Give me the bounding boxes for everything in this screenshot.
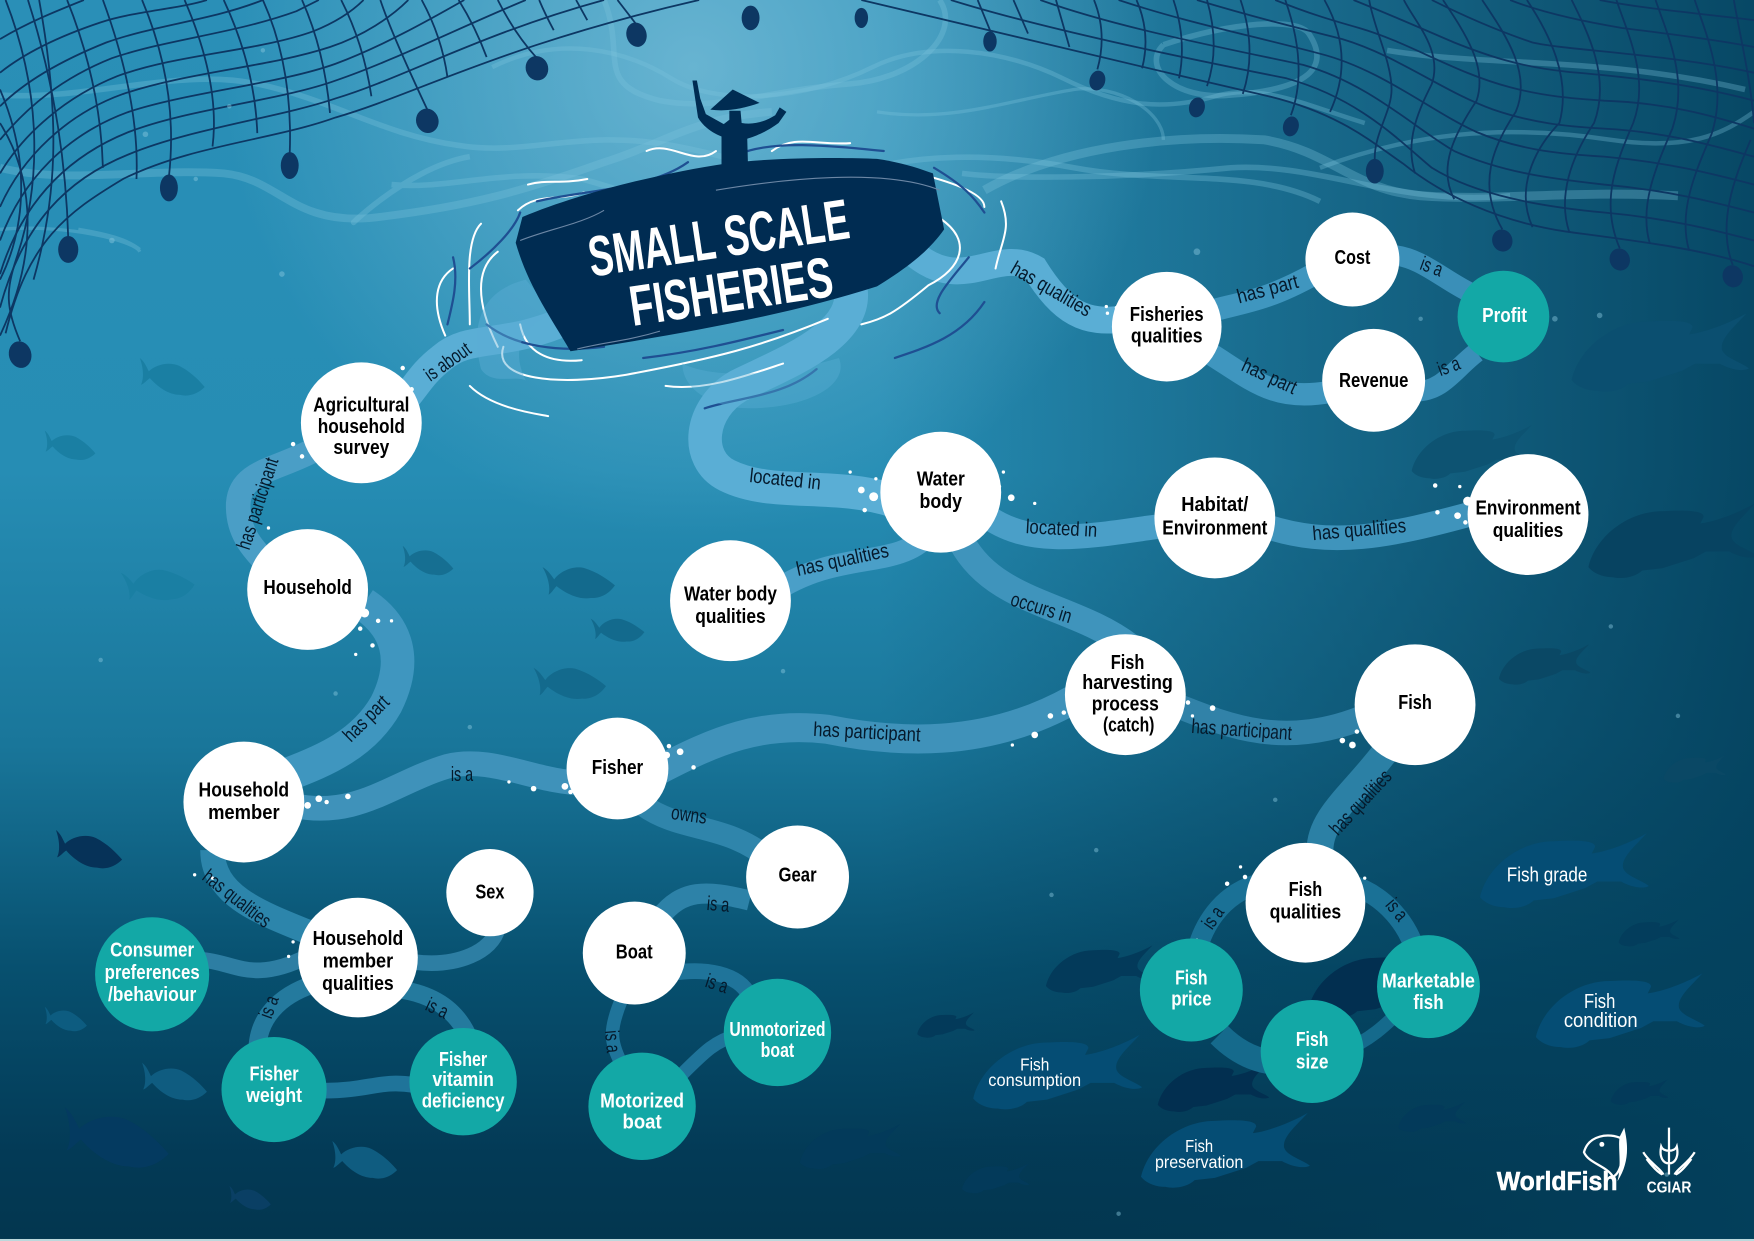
connector labels: is a	[1381, 894, 1412, 926]
boat hull	[516, 158, 944, 351]
node: Fisher vitamin deficiency: deficiency	[422, 1089, 505, 1112]
node: Fish qualities	[1246, 843, 1365, 963]
connector labels	[198, 253, 1464, 1054]
node: Fish size	[1261, 1000, 1364, 1103]
node: Fish size: Fish	[1296, 1028, 1328, 1051]
logo: CGIAR: CGIAR	[1647, 1179, 1691, 1196]
node: Fish harvesting process (catch): Fish	[1111, 651, 1144, 674]
node: Unmotorized boat: Unmotorized	[729, 1018, 826, 1041]
node: Habitat/Environment: Habitat/	[1181, 493, 1249, 516]
node: Boat	[583, 902, 686, 1005]
labelled fish: Fish condition: condition	[1564, 1010, 1638, 1032]
node: Boat: Boat	[616, 941, 653, 964]
node: Profit	[1458, 271, 1549, 362]
node: Consumer preferences/behaviour: Consumer	[110, 938, 194, 961]
node: Fish harvesting process (catch): (catch)	[1103, 714, 1154, 737]
node: Water body	[880, 432, 1001, 553]
labelled fish: Fish consumption: Fish	[1020, 1055, 1049, 1075]
node: Unmotorized boat	[724, 979, 831, 1086]
node: Fisher weight: weight	[245, 1084, 302, 1107]
connector labels: is a	[255, 992, 284, 1021]
connector labels: is a	[451, 764, 474, 786]
node: Fish price: Fish	[1175, 966, 1208, 989]
water surface light caustics	[0, 0, 1754, 252]
node: Fish qualities: Fish	[1289, 878, 1322, 901]
connector labels: is a	[1435, 352, 1464, 381]
node: Fisher vitamin deficiency	[409, 1028, 517, 1135]
node: Household member qualities: Household	[313, 927, 403, 950]
node: Agricultural household survey	[301, 362, 422, 483]
node: Revenue	[1322, 329, 1425, 432]
node: Motorized boat: boat	[623, 1111, 662, 1134]
node: Water body qualities	[670, 540, 791, 661]
node: Fish size: size	[1296, 1050, 1328, 1073]
node: Fish: Fish	[1398, 691, 1432, 714]
node: Fisher weight	[221, 1037, 327, 1142]
connector labels: has part	[339, 691, 394, 746]
net floats	[6, 6, 1746, 370]
node: Motorized boat: Motorized	[600, 1089, 684, 1112]
labelled fish: Fish preservation: preservation	[1155, 1152, 1243, 1172]
connector labels: located in	[748, 465, 822, 494]
labelled fish: Fish grade: Fish grade	[1507, 864, 1587, 886]
connector labels: is a	[422, 994, 452, 1024]
connector labels: is a	[1417, 253, 1446, 282]
connector labels: has part	[1238, 355, 1300, 399]
connector labels: owns	[670, 802, 708, 829]
node: Consumer preferences/behaviour	[95, 917, 209, 1031]
node: Fisher vitamin deficiency: vitamin	[432, 1068, 494, 1091]
node: Marketable fish: Marketable	[1382, 970, 1475, 993]
connector labels: has participant	[813, 719, 921, 746]
labelled fish: Fish condition	[1536, 973, 1705, 1048]
node: Water body qualities: Water body	[684, 583, 777, 606]
logo: CGIAR	[1643, 1128, 1695, 1196]
node: Fish qualities: qualities	[1270, 900, 1341, 923]
connector labels: is a	[703, 970, 731, 998]
node: Consumer preferences/behaviour: /behaviour	[108, 983, 196, 1006]
logo: WorldFish: WorldFish	[1497, 1168, 1618, 1196]
boat highlight strokes	[520, 177, 940, 349]
node: Fish price	[1140, 939, 1243, 1041]
node: Sex	[446, 849, 534, 936]
connector labels: has qualities	[198, 866, 275, 933]
background fish: right side silhouettes	[800, 313, 1754, 1193]
node: Habitat/Environment: Environment	[1162, 517, 1267, 540]
connector labels: is a	[600, 1029, 624, 1054]
connector labels: has qualities	[1007, 258, 1095, 321]
title: SMALL SCALE	[584, 187, 853, 290]
node: Environment qualities	[1468, 454, 1588, 575]
node: Household member qualities: qualities	[322, 972, 394, 995]
node: Environment qualities: qualities	[1493, 519, 1563, 542]
node: Household member: member	[208, 801, 280, 824]
node: Agricultural household survey: household	[318, 415, 405, 438]
node: Fish price: price	[1171, 988, 1211, 1011]
connector labels: has participant	[233, 455, 284, 552]
node: Motorized boat	[588, 1053, 696, 1160]
node: Water body: Water	[917, 467, 965, 490]
node: Unmotorized boat: boat	[761, 1039, 794, 1062]
node: Environment qualities: Environment	[1475, 497, 1581, 520]
logo: WorldFish	[1497, 1128, 1627, 1196]
connector labels: has participant	[1191, 716, 1293, 745]
labelled fish: Fish grade	[1480, 833, 1649, 908]
node: Agricultural household survey: survey	[333, 436, 390, 459]
node: Fisher weight: Fisher	[249, 1063, 299, 1086]
connector labels: has qualities	[1326, 766, 1397, 840]
node: Household member qualities	[298, 898, 418, 1017]
node: Gear	[746, 826, 849, 928]
node: Fisher vitamin deficiency: Fisher	[439, 1048, 487, 1071]
node: Fish harvesting process (catch): process	[1092, 692, 1159, 715]
node: Water body: body	[920, 490, 962, 513]
labelled fish: Fish consumption: consumption	[988, 1070, 1081, 1090]
connector ribbons	[201, 252, 1477, 1091]
node: Marketable fish: fish	[1413, 991, 1444, 1014]
node: Sex: Sex	[475, 880, 505, 903]
node: Household	[247, 529, 368, 650]
node: Fish harvesting process (catch)	[1065, 634, 1186, 755]
fishing net: right	[861, 0, 1754, 266]
node: Agricultural household survey: Agricultural	[313, 394, 409, 417]
fisherman silhouette	[692, 81, 786, 179]
node: Cost: Cost	[1335, 246, 1370, 269]
connector labels: occurs in	[1008, 589, 1074, 628]
background fish: left side silhouettes	[45, 358, 646, 1210]
node: Profit: Profit	[1482, 304, 1527, 327]
labelled fish: Fish condition: Fish	[1584, 991, 1615, 1013]
node: Fisheries qualities: qualities	[1131, 324, 1203, 347]
connector labels: has qualities	[1311, 515, 1407, 545]
labelled fish: Fish preservation	[1141, 1113, 1310, 1188]
node: Consumer preferences/behaviour: preferences	[105, 961, 200, 984]
node: Cost	[1305, 213, 1399, 307]
node: Water body qualities: qualities	[695, 605, 766, 628]
labelled fish: Fish preservation: Fish	[1185, 1136, 1213, 1156]
connector labels: is a	[1198, 902, 1229, 933]
node: Fisheries qualities: Fisheries	[1130, 303, 1204, 326]
node: Fish	[1355, 644, 1475, 765]
connector labels: has part	[1235, 271, 1301, 308]
node: Household member	[183, 742, 304, 862]
node: Marketable fish	[1377, 935, 1480, 1038]
connector labels: located in	[1025, 516, 1098, 542]
connector labels: is a	[706, 893, 731, 917]
water swirls around the boat	[437, 142, 1006, 416]
title	[584, 187, 862, 344]
node: Household member qualities: member	[323, 950, 393, 973]
node: Gear: Gear	[779, 863, 817, 886]
title: FISHERIES	[625, 245, 837, 339]
connector labels: is about	[421, 338, 476, 386]
labelled fish: Fish consumption	[973, 1035, 1142, 1109]
node: Habitat/Environment	[1154, 458, 1275, 578]
node: Household: Household	[263, 576, 352, 599]
node: Fisheries qualities	[1112, 272, 1222, 381]
node: Fish harvesting process (catch): harvesting	[1082, 671, 1173, 694]
bubbles	[193, 305, 1472, 958]
node: Fisher: Fisher	[592, 756, 643, 779]
connector labels: has qualities	[794, 540, 891, 581]
node: Revenue: Revenue	[1339, 369, 1408, 392]
node: Fisher	[567, 718, 668, 819]
node: Household member: Household	[199, 778, 289, 801]
fishing net: left	[0, 0, 699, 341]
